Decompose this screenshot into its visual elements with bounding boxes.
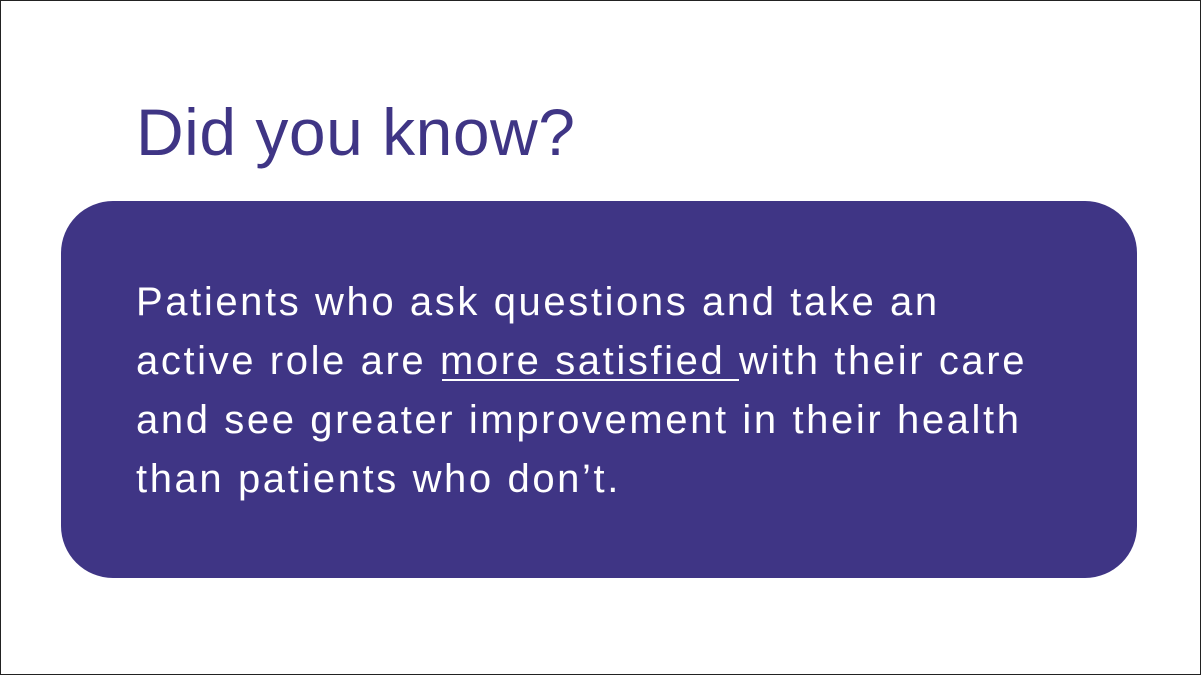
text block: fact [136, 280, 1027, 501]
text block: fact: Patients who ask questions and take an [136, 280, 940, 324]
text block: fact: and see greater improvement in their health [136, 398, 1022, 442]
text block: fact: active role are with their care [136, 339, 1027, 383]
title: Did you know? [136, 95, 575, 169]
panel: fact box [61, 201, 1137, 578]
text block: fact: than patients who don’t. [136, 457, 621, 501]
text block: fact: more satisfied [440, 339, 725, 383]
